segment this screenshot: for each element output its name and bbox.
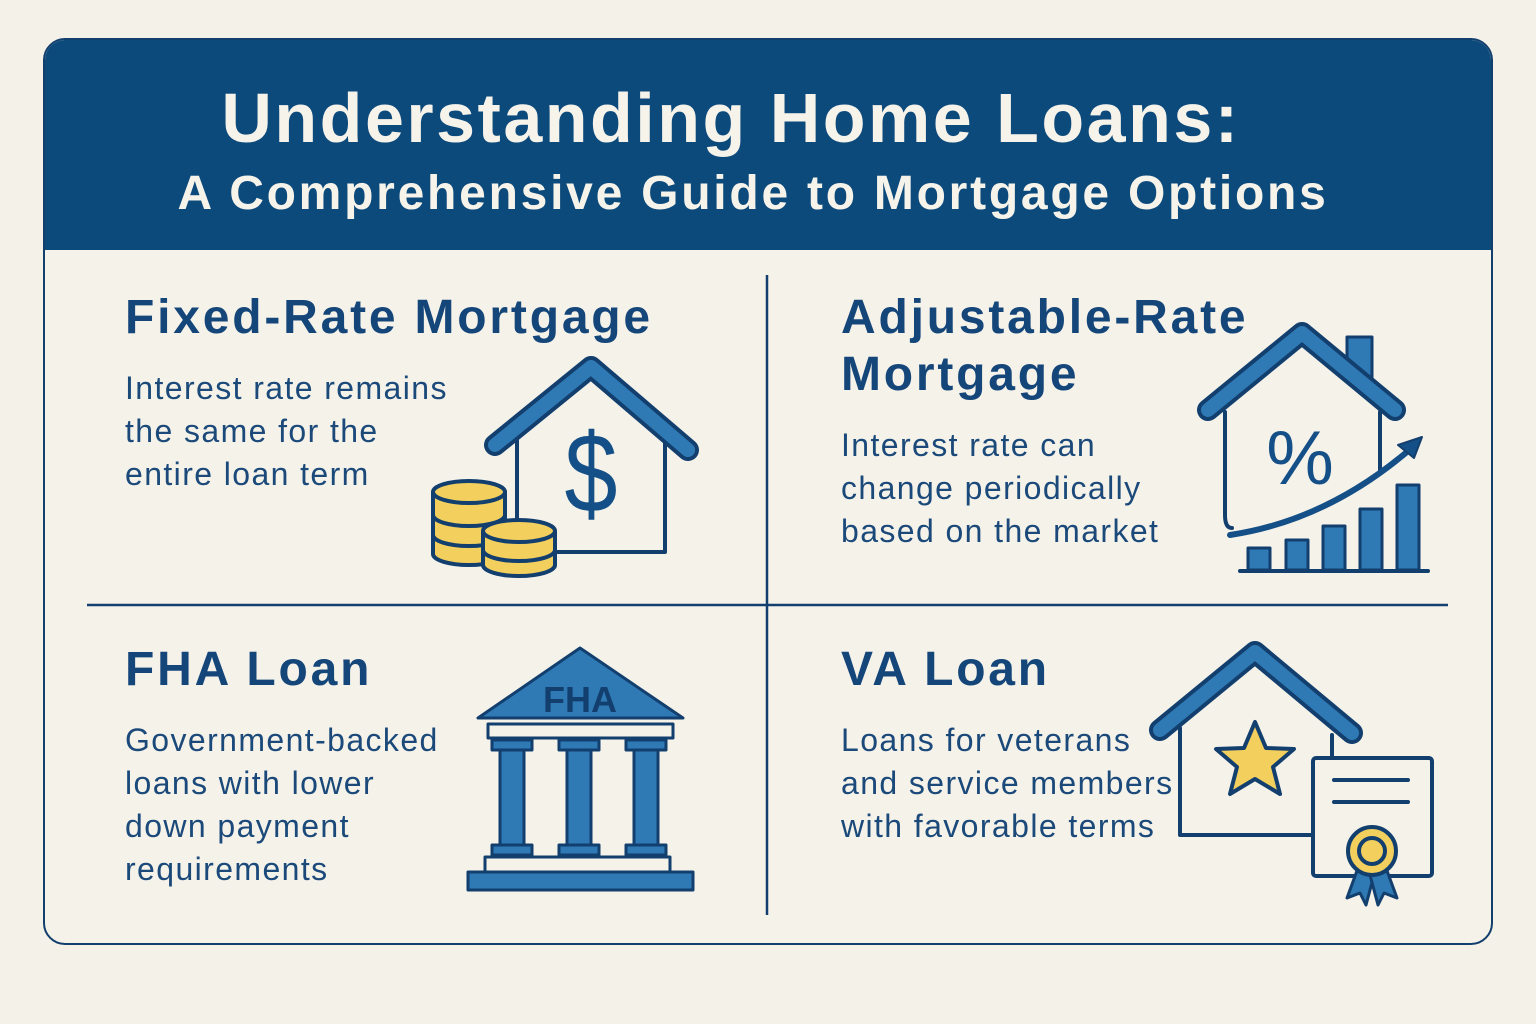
header	[45, 40, 1491, 250]
text: FHA: Government-backed	[125, 722, 439, 758]
icon: FHA building	[468, 648, 693, 890]
heading: VA: VA Loan	[841, 643, 1050, 696]
icon: house with dollar and coins	[433, 367, 688, 576]
icon: house with star and certificate	[1160, 652, 1432, 905]
text: FHA	[125, 722, 439, 887]
text: fixed-rate	[125, 370, 448, 492]
heading: fixed-rate: Fixed-Rate Mortgage	[125, 291, 653, 344]
subtitle: A Comprehensive Guide to Mortgage Options	[177, 167, 1329, 220]
text: fixed-rate: the same for the	[125, 413, 379, 449]
text: adjustable-rate: based on the market	[841, 513, 1159, 549]
text: FHA: loans with lower	[125, 765, 375, 801]
icon: FHA building: FHA	[543, 679, 617, 720]
heading: adjustable-rate	[841, 291, 1248, 401]
text: adjustable-rate	[841, 427, 1159, 549]
title: Understanding Home Loans:	[221, 79, 1241, 157]
text: FHA: requirements	[125, 851, 329, 887]
text: adjustable-rate: Interest rate can	[841, 427, 1096, 463]
icon: house with dollar and coins: $	[565, 412, 617, 537]
text: VA	[841, 722, 1174, 844]
heading: adjustable-rate: Mortgage	[841, 348, 1079, 401]
heading: FHA: FHA Loan	[125, 643, 372, 696]
text: VA: Loans for veterans	[841, 722, 1131, 758]
text: fixed-rate: Interest rate remains	[125, 370, 448, 406]
text: fixed-rate: entire loan term	[125, 456, 370, 492]
text: VA: and service members	[841, 765, 1174, 801]
icon: house with percent and rising chart: %	[1266, 416, 1334, 501]
heading: adjustable-rate: Adjustable-Rate	[841, 291, 1248, 344]
text: adjustable-rate: change periodically	[841, 470, 1142, 506]
text: FHA: down payment	[125, 808, 350, 844]
icon: house with percent and rising chart	[1208, 333, 1428, 571]
text: VA: with favorable terms	[841, 808, 1155, 844]
